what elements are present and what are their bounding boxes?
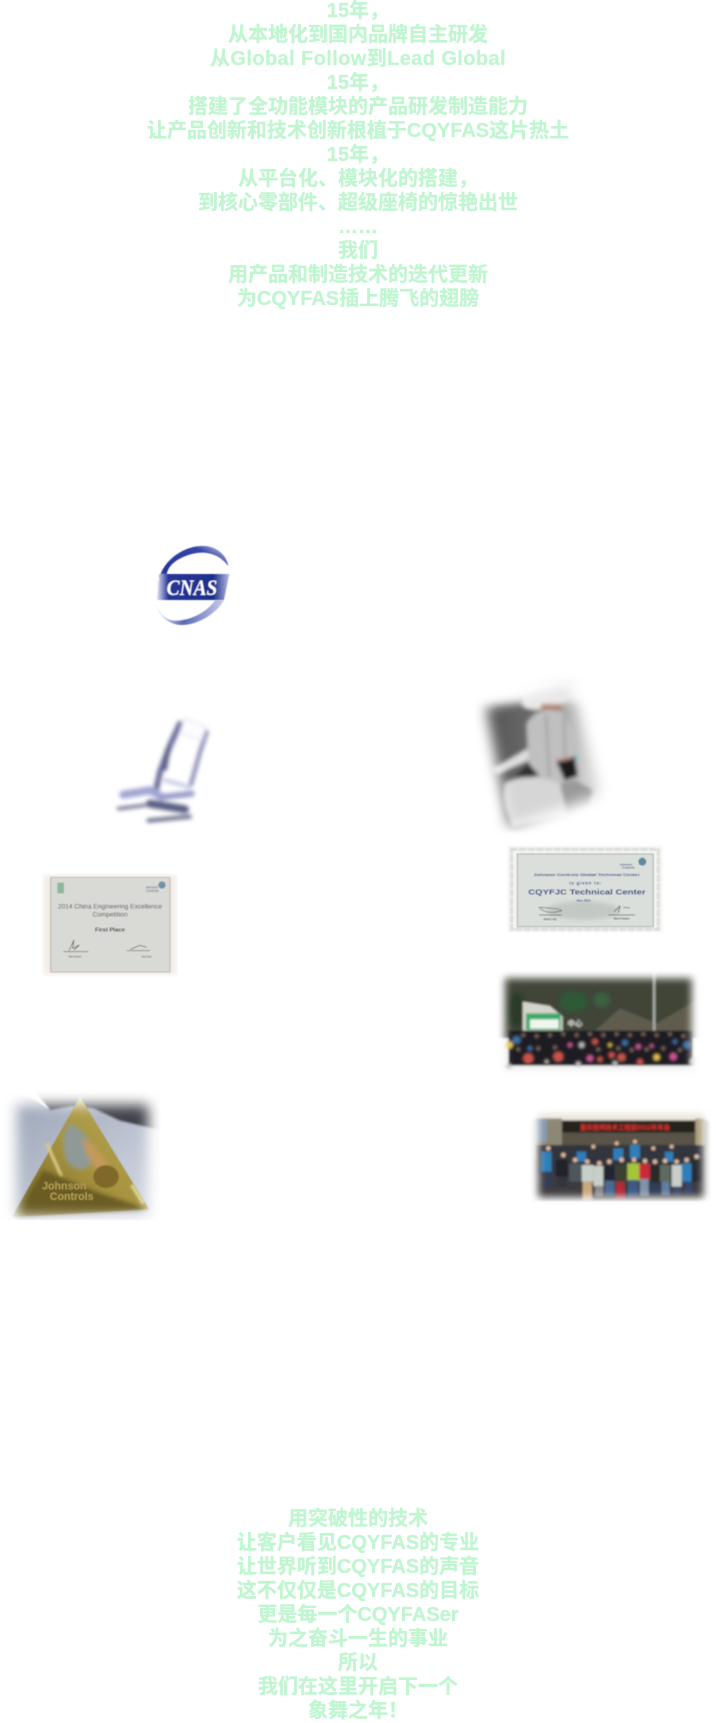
icon: CNAS logo: CNAS <box>167 575 217 600</box>
image: technical center plaque: Nov. 2013 <box>577 899 591 903</box>
intro text block: 我们 <box>338 240 378 262</box>
image: 2014 China Engineering Excellence certificate: First Place <box>95 927 125 933</box>
image: technical center plaque: Johnson <box>620 862 632 866</box>
timeline photos and icons <box>8 545 710 1220</box>
image: large group photo <box>498 972 698 1071</box>
image: technical center plaque: David Long <box>544 919 557 921</box>
image: technical center plaque: CQYFJC Technical Center <box>528 887 646 896</box>
intro text block: 15年， <box>327 144 389 166</box>
image: 2014 China Engineering Excellence certificate: Competition <box>92 912 128 919</box>
intro text block: 搭建了全功能模块的产品研发制造能力 <box>188 96 528 118</box>
closing text block: 用突破性的技术 <box>288 1508 428 1530</box>
intro text block: 15年， <box>327 72 389 94</box>
intro text block: 用产品和制造技术的迭代更新 <box>228 264 488 286</box>
image: gold triangle trophy: Controls <box>50 1191 94 1203</box>
image: technical center plaque: Controls <box>622 865 635 869</box>
image: large group photo: 中心 <box>568 1019 583 1028</box>
image: 2014 China Engineering Excellence certificate: Mark Nelson <box>68 955 82 958</box>
intro text block: 为CQYFAS插上腾飞的翅膀 <box>237 288 479 310</box>
image: 2014 China Engineering Excellence certificate <box>42 873 178 977</box>
intro text block: …… <box>338 216 378 238</box>
intro text block: 从Global Follow到Lead Global <box>210 48 506 70</box>
closing text block: 象舞之年！ <box>308 1700 408 1722</box>
image: technical center plaque <box>507 845 663 933</box>
image: technical center plaque: Johnson Controls Global Technical Center <box>534 873 640 877</box>
image: technical center plaque: Is given to: <box>569 880 602 885</box>
image: gold triangle trophy: Johnson <box>42 1180 87 1192</box>
image: 2014 China Engineering Excellence certificate: Johnson <box>145 885 158 889</box>
image: 2014 China Engineering Excellence certificate: Controls <box>146 889 159 893</box>
closing text block: 让世界听到CQYFAS的声音 <box>237 1556 479 1578</box>
closing text block: 所以 <box>338 1652 378 1674</box>
intro text block <box>147 0 569 310</box>
closing text block: 更是每一个CQYFASer <box>257 1604 459 1626</box>
image: 2014 China Engineering Excellence certificate: Zeal Jeter <box>141 955 152 958</box>
closing text block: 让客户看见CQYFAS的专业 <box>237 1532 479 1554</box>
intro text block: 15年， <box>327 0 389 22</box>
image: 2014 China Engineering Excellence certificate: 2014 China Engineering Excellence <box>58 903 162 910</box>
image: second group photo <box>530 1108 712 1202</box>
icon: CNAS logo <box>157 546 229 625</box>
intro text block: 让产品创新和技术创新根植于CQYFAS这片热土 <box>147 120 569 142</box>
closing text block: 为之奋斗一生的事业 <box>268 1628 448 1650</box>
intro text block: 到核心零部件、超级座椅的惊艳出世 <box>198 192 518 214</box>
image: technical center plaque: Mark K Sutton <box>614 917 630 920</box>
closing text block <box>237 1508 479 1722</box>
closing text block: 我们在这里开启下一个 <box>258 1676 458 1698</box>
closing text block: 这不仅仅是CQYFAS的目标 <box>237 1580 479 1602</box>
image: gold triangle trophy <box>0 1090 160 1220</box>
image: seat frame <box>118 719 207 821</box>
image: luxury seat photo <box>477 684 602 832</box>
intro text block: 从平台化、模块化的搭建， <box>238 168 478 190</box>
image: second group photo: 重庆座椅技术工程部2012年年会 <box>580 1123 671 1132</box>
intro text block: 从本地化到国内品牌自主研发 <box>228 24 488 46</box>
